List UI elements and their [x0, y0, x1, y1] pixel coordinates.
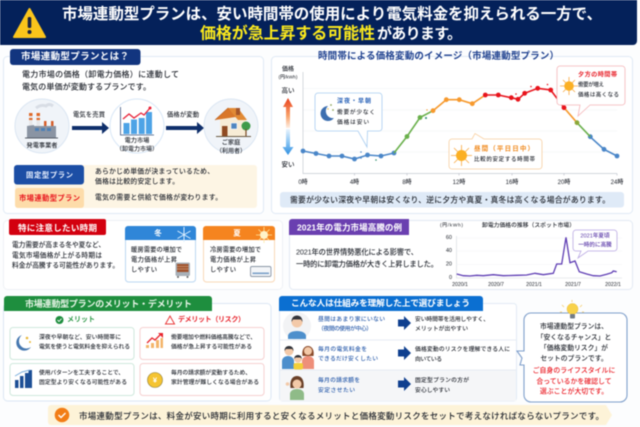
icon: house	[204, 99, 258, 155]
fixed plan text	[95, 166, 214, 186]
panel: periods to watch	[4, 219, 282, 290]
card: variable bills	[140, 364, 264, 396]
row: away during the day	[283, 312, 489, 340]
x axis labels: 20時	[558, 178, 570, 186]
row: away during the day: 安い時間帯を活用しやすく、	[415, 315, 489, 323]
callout: summer 2021	[573, 230, 617, 258]
icon: bar chart	[15, 370, 32, 388]
heading tab	[10, 49, 140, 65]
line: peak red	[483, 84, 566, 110]
icon: power market chart: （卸電力市場）	[116, 145, 158, 153]
card: variable bills: 家計管理が難しくなる場合がある	[171, 378, 259, 386]
card: variable bills: 毎月の請求額が変動するため、	[171, 368, 251, 376]
merit heading: メリット	[67, 316, 95, 324]
card: low-cost use	[10, 328, 134, 360]
icon: warning triangle	[14, 9, 45, 37]
intro text: 電力市場の価格（卸電力価格）に連動して	[22, 69, 179, 79]
callout: daytime: 比較的安定する時間帯	[474, 155, 535, 163]
merit heading	[56, 316, 95, 324]
arrow: price changes: 価格が変動	[167, 110, 199, 118]
arrow: sell electricity	[72, 110, 109, 134]
row: away during the day: メリットが出やすい	[415, 324, 468, 332]
callout: evening	[557, 66, 625, 116]
icon: family	[282, 346, 314, 370]
line: overnight blue	[301, 134, 619, 161]
icon: power market chart	[110, 99, 164, 153]
plan comparison table	[14, 165, 257, 208]
callout: evening: 夕方の時間帯	[578, 70, 617, 78]
chart note: 需要が少ない深夜や早朝は安くなり、逆に夕方や真夏・真冬は高くなる場合があります。	[290, 194, 610, 204]
callout: late night and early morning	[315, 93, 382, 147]
line chart: spot market price: 0	[449, 275, 452, 281]
conclusion bar: 市場連動型プランは、料金が安い時期に利用すると安くなるメリットと価格変動リスクをセットで考えなければならないプランです。	[79, 411, 604, 421]
line: morning green	[375, 111, 590, 161]
line chart: spot market price: 2020/7	[488, 282, 504, 288]
fixed plan label: 固定型プラン	[26, 170, 73, 180]
callout: summer 2021: 一時的に高騰	[578, 240, 612, 248]
card: price spikes: 価格が急上昇する可能性がある	[171, 342, 252, 350]
intro text	[22, 69, 179, 92]
evening point	[575, 120, 579, 125]
x axis labels	[298, 178, 623, 186]
body text: 電力需要が高まる冬や夏など、	[12, 240, 105, 249]
icon: woman	[286, 376, 304, 400]
card: winter: 冬	[154, 228, 162, 238]
icon: moon	[320, 104, 334, 121]
line chart: spot market price	[440, 221, 622, 288]
card: summer	[203, 226, 275, 282]
line chart: spot market price: (円/kWh)	[440, 222, 463, 228]
panel: price by time of day	[272, 50, 632, 214]
demerit heading	[166, 314, 245, 324]
icon: power market chart: 電力市場	[125, 136, 149, 144]
icon: rising graph	[146, 333, 163, 348]
row: away during the day: 昼間はあまり家にいない	[318, 315, 385, 323]
market plan label: 市場連動型プラン	[19, 194, 80, 202]
card: usage patterns: 固定型より安くなる可能性がある	[39, 378, 127, 386]
icon: person	[283, 312, 311, 340]
heading tab: 市場連動型プランとは？	[21, 50, 129, 62]
line chart: spot market price: 2020/1	[452, 282, 468, 288]
line chart: spot market price: 2021/1	[526, 282, 542, 288]
x axis labels: 24時	[611, 178, 623, 186]
icon: snowflake	[178, 227, 190, 242]
body text: 料金が高騰する可能性があります。	[12, 260, 119, 270]
icon: air conditioner	[250, 266, 271, 276]
callout: late night and early morning: 深夜・早朝	[337, 97, 371, 105]
fixed plan text: 価格は比較的安定します。	[95, 176, 179, 186]
callout: late night and early morning: 需要が少なく	[337, 108, 375, 116]
icon: house: ご家庭	[222, 138, 241, 146]
heading tab: 特に注意したい時期	[18, 223, 97, 233]
heading tab	[289, 219, 409, 235]
row: stable bills	[286, 376, 469, 400]
callout: summer 2021: 2021年夏頃	[580, 232, 610, 240]
line chart: spot market price: 2022/1	[605, 282, 621, 288]
chart note	[280, 192, 624, 208]
y axis labels: 価格	[282, 65, 294, 73]
y axis labels: (円/kWh)	[279, 74, 298, 80]
icon: sun	[451, 145, 472, 166]
card: usage patterns: 使用パターンを工夫することで、	[39, 368, 124, 376]
heading tab	[279, 296, 483, 311]
market plan label	[15, 188, 84, 208]
chart heading: 時間帯による価格変動のイメージ（市場連動型プラン）	[318, 50, 559, 62]
callout: evening: 価格は高くなる	[578, 90, 619, 98]
icon: yen coin: ¥	[153, 376, 158, 384]
line chart: spot market price: 2021/7	[565, 282, 581, 288]
demerit heading: デメリット（リスク）	[178, 314, 245, 324]
card: summer: 冷房需要の増加で	[210, 244, 261, 254]
callout: key advice	[517, 300, 627, 402]
icon: heater	[176, 262, 190, 278]
panel: who should choose	[279, 296, 516, 401]
card: winter: しやすい	[131, 266, 157, 274]
row: stable bills: 安心しやすい	[415, 386, 450, 394]
body text	[296, 248, 438, 268]
callout: key advice: 「安くなるチャンス」と	[537, 332, 611, 342]
heading tab: 2021年の電力市場高騰の例	[297, 222, 402, 232]
heading tab: 市場連動型プランのメリット・デメリット	[25, 298, 192, 309]
icon: check	[55, 408, 69, 422]
body text	[12, 240, 119, 270]
panel: merits and demerits	[4, 296, 271, 401]
callout: key advice: ご自身のライフスタイルに	[533, 366, 615, 374]
fixed plan text: あらかじめ単価が決まっているため、	[95, 166, 214, 176]
line chart: spot market price: 40	[446, 248, 452, 254]
row: lower bills: 価格変動のリスクを理解できる人に	[415, 345, 510, 353]
arrow: price changes	[166, 110, 204, 134]
title: があります。	[377, 24, 462, 42]
icon: sun	[256, 227, 272, 243]
body text: 電気市場価格が上がる時期は	[12, 250, 102, 260]
heading tab: こんな人は仕組みを理解した上で選びましょう	[291, 297, 470, 308]
conclusion bar	[48, 405, 612, 425]
y axis labels	[279, 65, 298, 168]
callout: key advice: セットのプランです。	[540, 354, 608, 362]
card: price spikes	[140, 328, 264, 360]
panel: 2021 price spike	[289, 219, 632, 290]
arrow: sell electricity: 電気を売買	[73, 110, 106, 118]
card: winter: 電力価格が上昇	[131, 254, 178, 264]
row: stable bills: 毎月の請求額を	[318, 376, 360, 384]
callout: daytime: 昼間（平日日中）	[474, 144, 534, 152]
line chart: spot market price: 60	[446, 235, 452, 241]
x axis labels: 0時	[298, 178, 308, 186]
y axis labels: 安い	[282, 160, 295, 168]
row: lower bills: できるだけ安くしたい	[318, 354, 378, 362]
row: stable bills: 固定型プランの方が	[415, 376, 469, 384]
card: summer: 夏	[233, 228, 241, 238]
intro text: 電気の単価が変動するプランです。	[22, 82, 151, 92]
row: away during the day: （夜間の使用が中心）	[318, 324, 372, 332]
callout: daytime	[449, 134, 542, 169]
line chart: spot market price: 卸電力価格の推移（スポット市場）	[482, 221, 575, 229]
header banner	[0, 0, 637, 45]
line chart	[298, 72, 623, 186]
icon: power plant	[15, 99, 69, 153]
heading tab	[4, 296, 212, 311]
row: stable bills: 安定させたい	[318, 386, 355, 394]
body text: 一時的に卸電力価格が大きく上昇しました。	[296, 260, 438, 268]
y axis labels: 高い	[282, 86, 295, 94]
title	[62, 4, 602, 42]
callout: key advice: 合っているかを確認して	[536, 376, 612, 386]
card: usage patterns	[10, 364, 134, 396]
callout: evening: 需要が増え	[578, 80, 604, 88]
card: low-cost use: 電気を使うと電気料金を抑えられる	[39, 342, 130, 350]
x axis labels: 12時	[453, 178, 465, 186]
fixed plan label	[14, 165, 84, 184]
callout: key advice: 「価格変動リスク」が	[540, 343, 608, 352]
callout: key advice: 市場連動型プランは、	[540, 322, 608, 330]
card: summer: しやすい	[210, 266, 236, 274]
line: midday orange	[426, 95, 577, 123]
row: lower bills: 毎月の電気料金を	[318, 345, 367, 353]
icon: power plant: 発電事業者	[27, 142, 57, 150]
card: winter: 暖房需要の増加で	[131, 244, 182, 254]
x axis labels: 8時	[402, 178, 412, 186]
icon: sun	[560, 77, 578, 95]
card: price spikes: 需要増加や燃料価格高騰などで、	[171, 333, 256, 341]
card: low-cost use: 深夜や早朝など、安い時間帯に	[39, 333, 121, 341]
x axis labels: 4時	[350, 178, 359, 186]
callout: key advice: 選ぶことが大切です。	[540, 386, 608, 396]
market plan text: 電気の需要と供給で価格が変わります。	[95, 192, 222, 202]
row: lower bills	[282, 345, 510, 370]
body text: 2021年の世界情勢悪化による影響で、	[296, 248, 418, 256]
heading tab	[9, 219, 106, 235]
icon: house: （利用者）	[216, 147, 246, 155]
card: winter	[125, 226, 196, 282]
row: lower bills: 向いている	[415, 355, 442, 363]
panel: what is the market-linked plan	[4, 49, 264, 214]
card: summer: 電力価格が上昇	[210, 254, 257, 264]
x axis labels: 16時	[506, 178, 518, 186]
icon: moon	[16, 335, 31, 351]
callout: late night and early morning: 価格は安い	[337, 118, 369, 126]
title: 市場連動型プランは、安い時間帯の使用により電気料金を抑えられる一方で、	[62, 4, 602, 23]
line chart: spot market price: 20	[446, 262, 452, 268]
icon: light bulb	[560, 300, 584, 318]
title: 価格が急上昇する可能性	[200, 24, 375, 42]
